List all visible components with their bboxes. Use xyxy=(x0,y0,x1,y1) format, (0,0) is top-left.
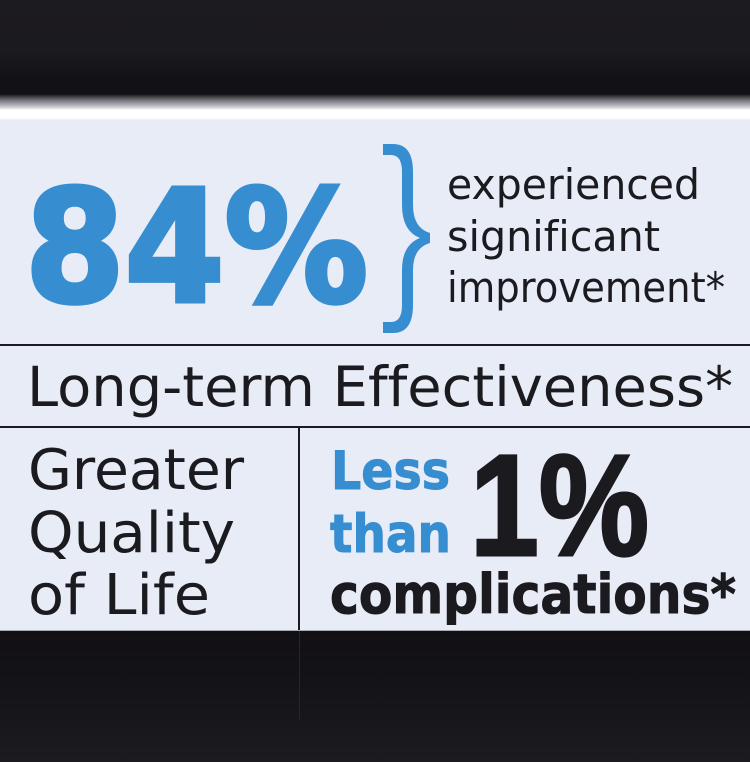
text: less than: Less xyxy=(331,441,450,502)
icon: curly brace xyxy=(383,144,430,333)
statistic: 1%: 1% xyxy=(470,425,649,586)
heading: long-term effectiveness: Long-term Effectiveness* xyxy=(27,355,733,419)
text: greater quality of life: Quality xyxy=(28,501,235,566)
top dark band xyxy=(0,0,750,94)
caption: experienced significant improvement xyxy=(447,160,725,312)
caption: experienced significant improvement: improvement* xyxy=(447,263,725,312)
caption: experienced significant improvement: experienced xyxy=(447,160,700,209)
light panel background xyxy=(0,120,750,630)
text: greater quality of life xyxy=(28,438,245,628)
white glow strip xyxy=(0,94,750,120)
text: less than xyxy=(330,441,451,565)
text: greater quality of life: of Life xyxy=(28,563,210,628)
text: less than: than xyxy=(330,504,451,565)
text: greater quality of life: Greater xyxy=(28,438,245,503)
divider line xyxy=(0,344,750,346)
bottom dark band xyxy=(0,630,750,762)
caption: experienced significant improvement: significant xyxy=(447,212,660,261)
divider line vertical xyxy=(298,427,300,630)
statistic: 84%: 84% xyxy=(25,157,368,338)
divider line xyxy=(0,426,750,428)
